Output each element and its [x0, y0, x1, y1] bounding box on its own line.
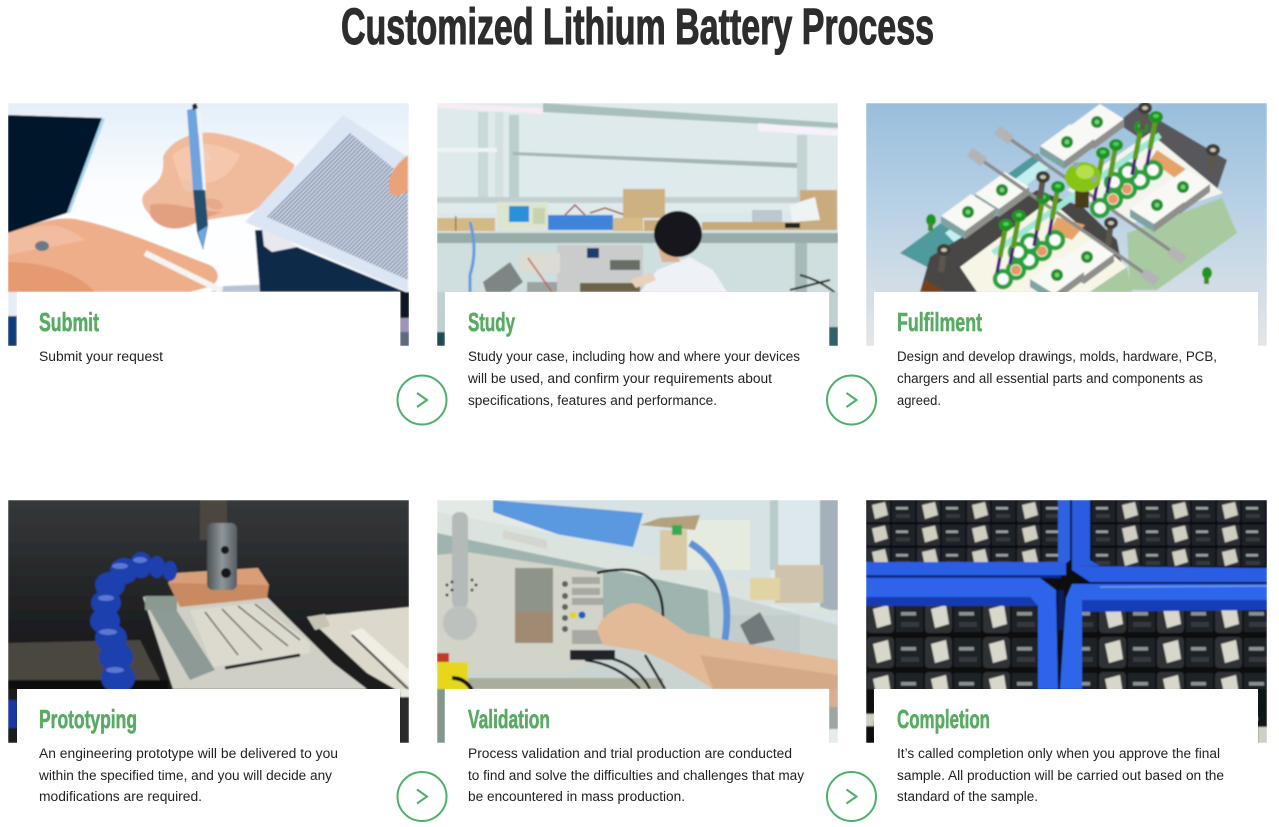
white caption card — [874, 689, 1258, 743]
description: Validation: to find and solve the difficulties and challenges that may — [468, 768, 804, 783]
white caption card — [445, 292, 829, 346]
heading: Fulfilment: Fulfilment — [897, 307, 982, 337]
description: Study: Study your case, including how and where your devices — [468, 349, 800, 364]
arrow: submit to study — [398, 376, 446, 424]
panel: completion — [866, 500, 1267, 804]
description: Completion — [897, 746, 1224, 804]
description: Validation — [468, 746, 804, 804]
photo: CAD model of a battery mold — [866, 103, 1267, 346]
photo: batteries in blue crates — [866, 500, 1267, 743]
description: Study: will be used, and confirm your requirements about — [467, 371, 772, 386]
white caption card — [17, 689, 400, 743]
description: Study — [467, 349, 800, 408]
panel: submit — [8, 103, 409, 364]
description: Fulfilment: Design and develop drawings, molds, hardware, PCB, — [897, 349, 1217, 364]
description: Completion: standard of the sample. — [897, 789, 1038, 804]
photo: hand adjusting an oscilloscope — [437, 500, 838, 743]
panel: validation — [437, 500, 838, 804]
photo: machining a copper electrode — [8, 500, 409, 743]
description: Prototyping: within the specified time, and you will decide any — [38, 768, 332, 783]
description: Prototyping: An engineering prototype will be delivered to you — [39, 746, 338, 761]
arrow: study to fulfilment — [827, 376, 876, 424]
description: Fulfilment: chargers and all essential parts and components as — [897, 371, 1203, 386]
white caption card — [874, 292, 1258, 346]
panel: fulfilment — [866, 102, 1267, 408]
description: Study: specifications, features and performance. — [468, 393, 717, 408]
description: Prototyping — [38, 746, 338, 804]
arrow: prototyping to validation — [398, 772, 446, 821]
description: Submit: Submit your request — [39, 349, 163, 364]
description: Fulfilment — [897, 349, 1217, 408]
description: Validation: be encountered in mass production. — [468, 789, 685, 804]
description: Fulfilment: agreed. — [897, 393, 941, 408]
description: Completion: sample. All production will be carried out based on the — [897, 768, 1224, 783]
photo: hands reviewing a document — [8, 103, 409, 346]
photo: engineer at a lab bench — [437, 103, 838, 346]
white caption card — [445, 689, 829, 743]
arrow: validation to completion — [827, 772, 876, 821]
panel: prototyping — [8, 500, 409, 804]
heading: Prototyping: Prototyping — [39, 704, 137, 734]
description: Prototyping: modifications are required. — [39, 789, 202, 804]
panel: study — [437, 103, 838, 408]
white caption card — [17, 292, 400, 346]
description: Validation: Process validation and trial production are conducted — [468, 746, 792, 761]
heading: Completion: Completion — [897, 704, 990, 734]
heading: Study: Study — [468, 307, 515, 337]
description: Completion: It’s called completion only when you approve the final — [897, 746, 1220, 761]
heading: Validation: Validation — [468, 704, 550, 734]
heading: Submit: Submit — [39, 307, 99, 337]
